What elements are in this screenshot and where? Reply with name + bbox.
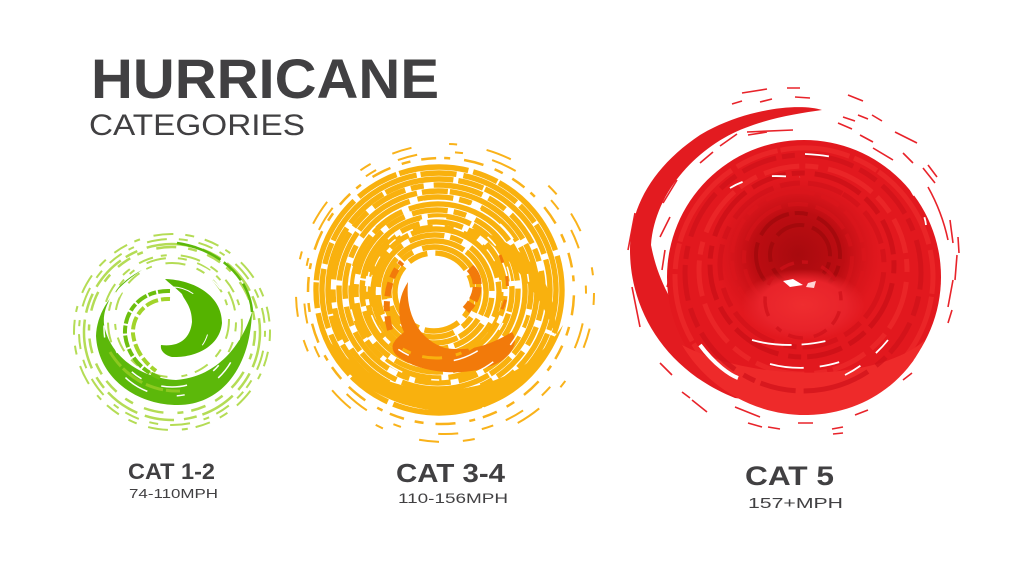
lower solid band bbox=[320, 325, 563, 412]
label: CAT 5: 157+MPH bbox=[748, 496, 843, 512]
lower light band bbox=[682, 340, 925, 415]
white streaks bbox=[316, 167, 562, 413]
outer dashed rain bands bbox=[41, 201, 303, 463]
eye specks bbox=[783, 279, 803, 287]
yellow streaks over dark area bbox=[346, 202, 526, 382]
label: CAT 1-2: 74-110MPH bbox=[129, 486, 218, 501]
main brush rings bbox=[274, 125, 604, 455]
title: CATEGORIES bbox=[89, 109, 305, 142]
lighter centre below eye bbox=[741, 269, 865, 341]
hurricane: category 3-4 orange swirl bbox=[254, 104, 628, 478]
title: HURRICANE bbox=[91, 47, 439, 110]
dark and light brush rings bbox=[639, 112, 969, 442]
dark orange spiral area bbox=[392, 282, 515, 372]
outer dashed rain marks bbox=[628, 88, 959, 434]
inner hook bbox=[161, 279, 222, 357]
label: CAT 5 bbox=[745, 461, 843, 512]
title bbox=[89, 47, 439, 142]
inner spiral arm bbox=[125, 291, 170, 378]
dark core bbox=[714, 177, 882, 333]
eye bbox=[409, 266, 459, 316]
label: CAT 1-2 bbox=[128, 459, 218, 501]
outer dashed rain bands bbox=[254, 104, 628, 478]
main crescent band bbox=[96, 270, 252, 405]
hurricane: category 5 red swirl bbox=[628, 88, 969, 442]
label: CAT 3-4 bbox=[396, 458, 508, 506]
label: CAT 3-4: CAT 3-4 bbox=[396, 458, 506, 488]
label: CAT 3-4: 110-156MPH bbox=[398, 490, 508, 506]
right solid band bbox=[470, 228, 555, 335]
label: CAT 5: CAT 5 bbox=[745, 461, 834, 491]
label: CAT 1-2: CAT 1-2 bbox=[128, 459, 215, 484]
main disc bbox=[667, 140, 941, 414]
hurricane: category 1-2 green swirl bbox=[41, 201, 303, 463]
outer crescent band bbox=[630, 107, 822, 405]
white streaks bbox=[89, 243, 255, 409]
white streaks bbox=[700, 154, 926, 378]
